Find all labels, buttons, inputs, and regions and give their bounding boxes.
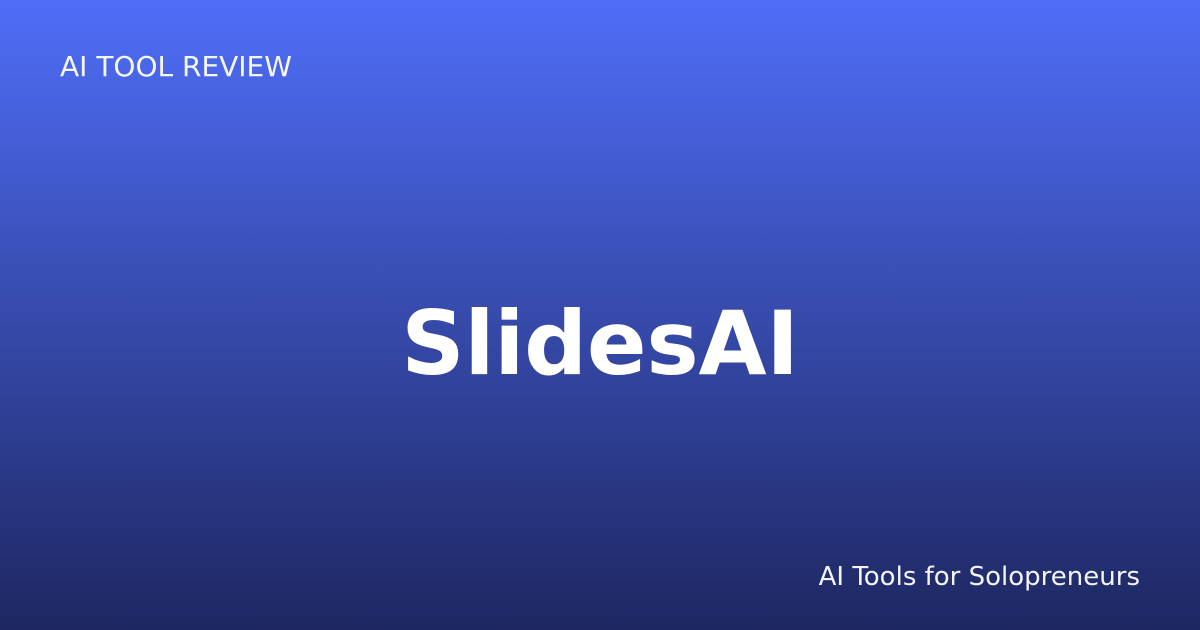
site name: AI Tools for Solopreneurs: AI Tools for Solopreneurs [819, 562, 1140, 592]
label: AI TOOL REVIEW: AI TOOL REVIEW [60, 50, 292, 83]
title: SlidesAI: SlidesAI [401, 292, 799, 395]
